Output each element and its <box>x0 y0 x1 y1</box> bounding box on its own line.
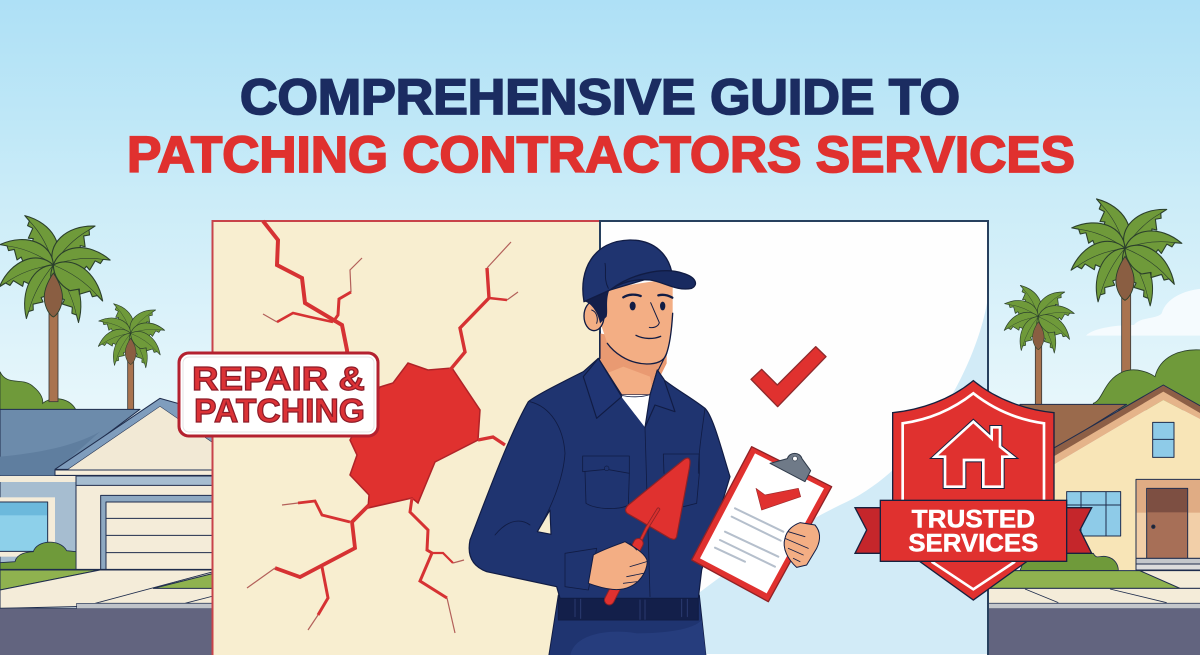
label: repair and patching: REPAIR & <box>192 360 365 397</box>
panel: white repaired wall <box>600 221 988 655</box>
cloud <box>1086 289 1200 336</box>
label: repair and patching <box>178 352 380 438</box>
panel: cream damaged wall <box>212 221 600 655</box>
left house <box>0 398 213 655</box>
shield <box>893 381 1054 600</box>
trowel <box>609 458 690 600</box>
title <box>127 69 1075 183</box>
badge: trusted services shield <box>855 381 1092 600</box>
cap <box>583 240 695 302</box>
bushes behind right house <box>1093 350 1200 410</box>
badge: trusted services shield: TRUSTED <box>912 505 1035 533</box>
icon: house <box>935 422 1013 487</box>
check mark: large <box>751 347 826 407</box>
scene: left house and palms <box>0 208 213 655</box>
bushes behind left house <box>0 372 76 410</box>
title: PATCHING CONTRACTORS SERVICES <box>127 126 1075 183</box>
palm: large left <box>0 208 111 402</box>
shirt <box>469 358 730 598</box>
crack: central hole with branching cracks <box>247 221 518 633</box>
palm: large right <box>1065 191 1183 377</box>
worker with trowel and clipboard <box>469 240 832 655</box>
hand holding trowel <box>588 542 647 590</box>
pants and belt <box>549 595 706 655</box>
badge: trusted services shield: SERVICES <box>908 530 1038 558</box>
label: repair and patching: PATCHING <box>194 392 365 429</box>
clipboard <box>692 447 832 602</box>
ribbon <box>855 508 882 553</box>
palm: small left <box>95 299 165 410</box>
scene: right house and palms <box>988 191 1200 655</box>
neck and face <box>584 278 673 397</box>
title: COMPREHENSIVE GUIDE TO <box>240 69 960 125</box>
palm: small right <box>1001 281 1075 407</box>
hand holding clipboard <box>784 523 819 567</box>
right house <box>988 385 1200 655</box>
